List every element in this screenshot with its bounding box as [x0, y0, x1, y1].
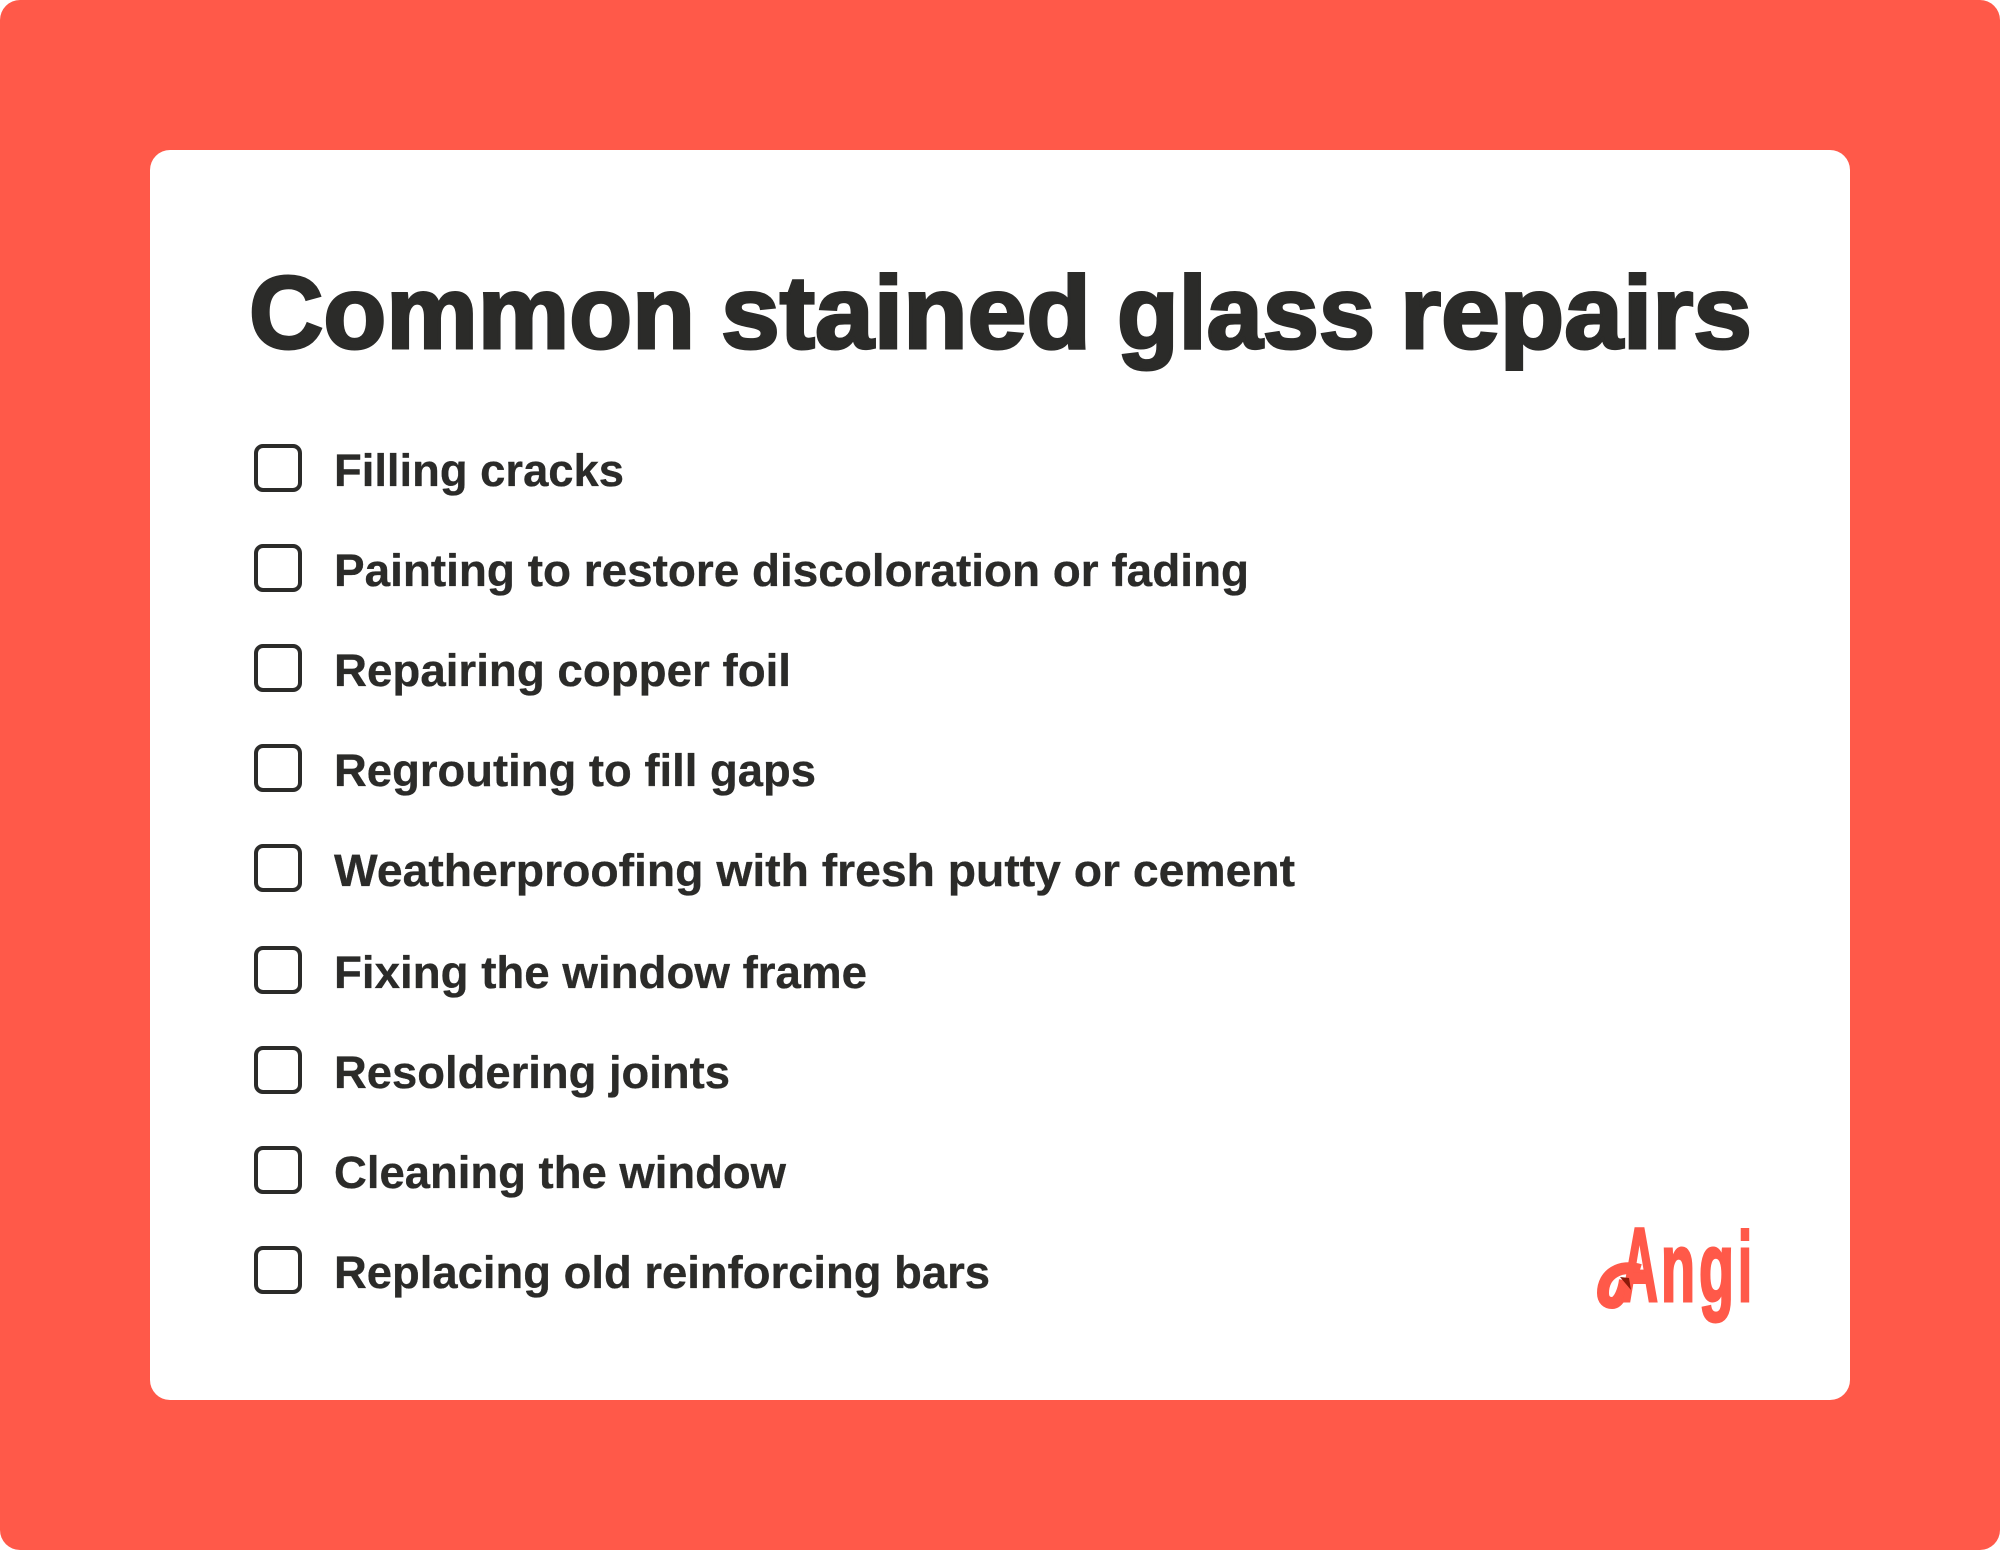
item: painting: Painting to restore discoloration or fading: [334, 545, 1249, 596]
item: resoldering joints: Resoldering joints: [334, 1047, 730, 1098]
title: repairs: [1400, 255, 1752, 370]
logo: Angi: [1603, 1207, 1752, 1324]
panel: white checklist card: [150, 150, 1850, 1400]
title: glass: [1117, 255, 1375, 370]
title: Common: [249, 255, 695, 370]
item: regrouting: Regrouting to fill gaps: [334, 745, 816, 796]
item: weatherproofing: Weatherproofing with fresh putty or cement: [334, 845, 1295, 896]
logo: Angi: n: [1661, 1212, 1695, 1322]
checklist: [256, 445, 1295, 1298]
item: repairing copper foil: Repairing copper foil: [334, 645, 791, 696]
title: stained: [721, 255, 1091, 370]
logo: Angi: i: [1738, 1212, 1752, 1322]
logo: Angi: g: [1699, 1212, 1734, 1322]
item: filling cracks: Filling cracks: [334, 445, 624, 496]
item: fixing window frame: Fixing the window frame: [334, 947, 867, 998]
logo: Angi: A: [1621, 1207, 1658, 1324]
item: cleaning the window: Cleaning the window: [334, 1147, 787, 1198]
item: replacing bars: Replacing old reinforcing bars: [334, 1247, 990, 1298]
